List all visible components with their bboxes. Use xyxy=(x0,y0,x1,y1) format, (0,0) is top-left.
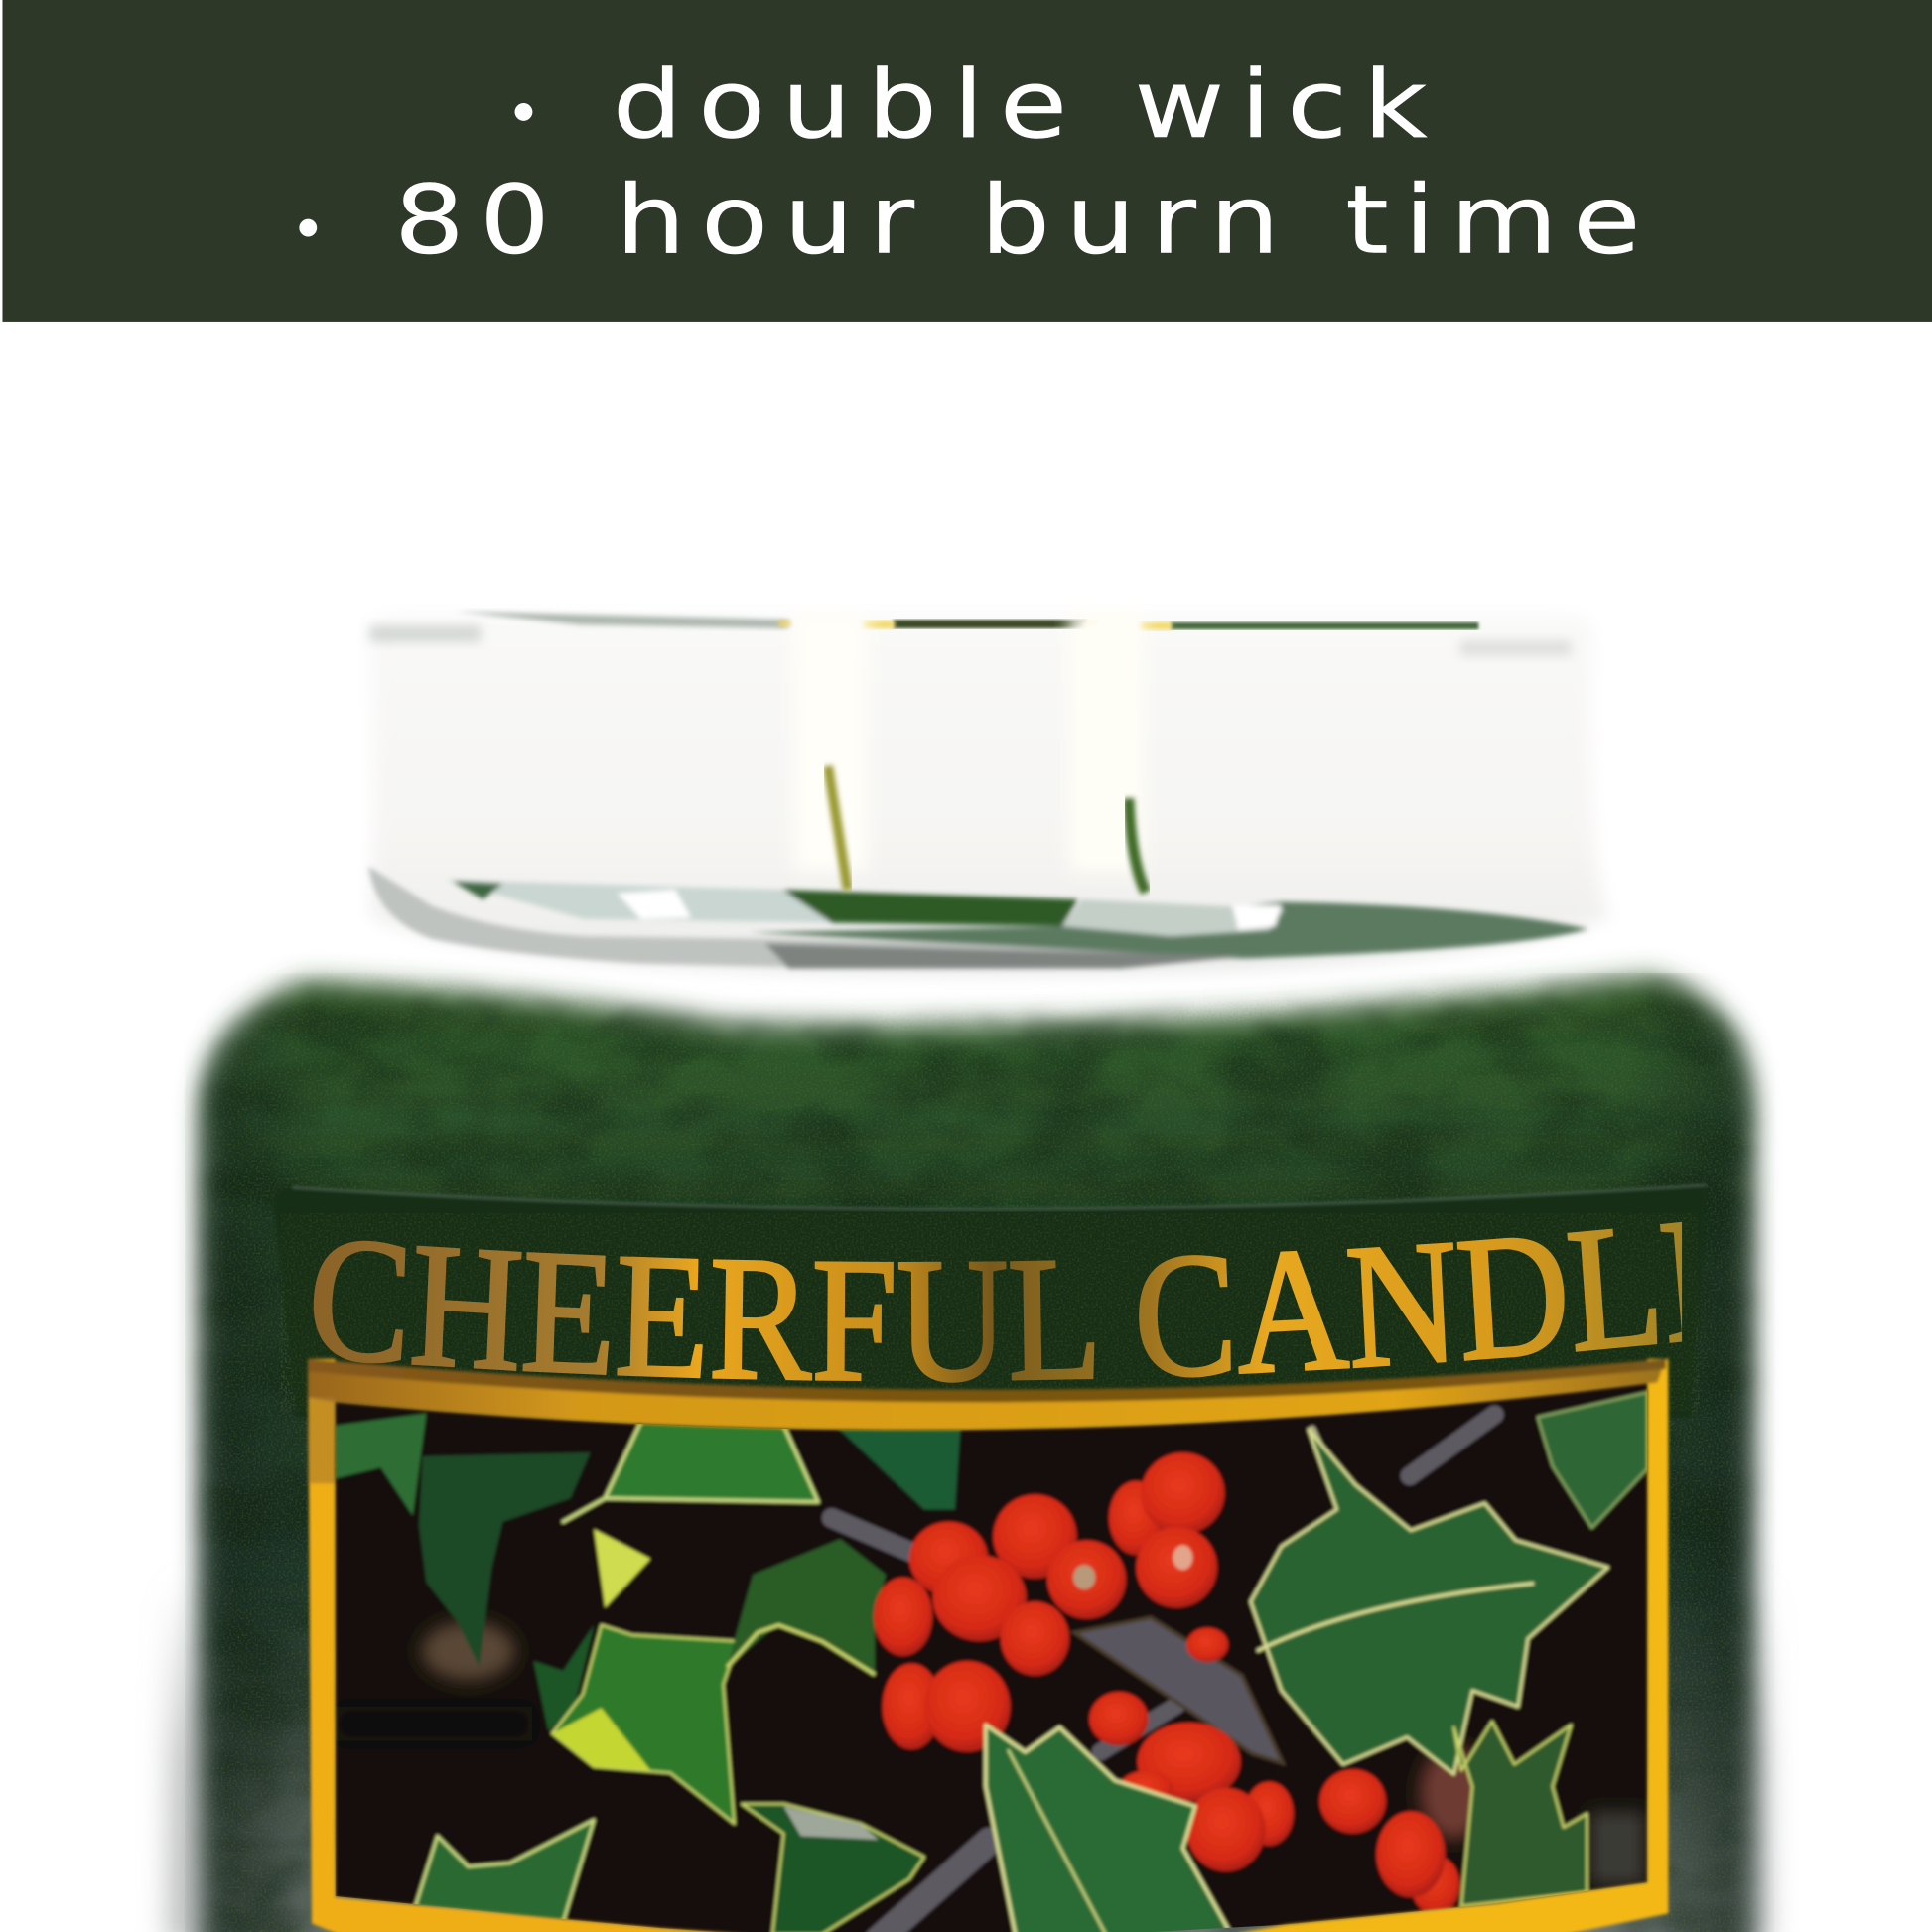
small dark leaf xyxy=(533,1625,594,1731)
brand name: CHEERFUL CANDLE xyxy=(314,1221,1682,1383)
big leaf midrib xyxy=(1257,1584,1534,1651)
flame glow left xyxy=(793,613,868,871)
feature: double wick: double wick xyxy=(613,50,1427,160)
leaf upper left xyxy=(419,1452,590,1667)
glass rim and neck xyxy=(367,612,1609,973)
leaf overlapping berries xyxy=(986,1725,1235,1932)
left side haze xyxy=(170,1578,203,1932)
product photo: holly xyxy=(321,1380,1676,1932)
right edge and bottom xyxy=(1232,1359,1668,1932)
left edge upper brown xyxy=(308,1397,336,1483)
bright leaf highlight xyxy=(552,1708,650,1770)
leaf top left corner xyxy=(336,1414,426,1516)
left edge xyxy=(308,1359,752,1932)
overlapping leaf midrib xyxy=(1008,1749,1109,1932)
header band xyxy=(2,0,1932,322)
pale spike xyxy=(594,1529,650,1608)
wax pool xyxy=(368,866,1588,968)
wick right xyxy=(1129,798,1146,893)
leaf bottom centre left xyxy=(742,1804,924,1932)
wax mottling xyxy=(185,973,1774,1932)
wick left xyxy=(828,766,848,890)
leaf centre edge xyxy=(727,1625,875,1675)
photo background xyxy=(321,1380,1676,1932)
big right leaf xyxy=(1251,1430,1608,1774)
leaf top centre left xyxy=(563,1417,818,1522)
right side haze xyxy=(1739,1578,1767,1932)
candle jar xyxy=(153,608,1784,1932)
wax body xyxy=(204,977,1749,1932)
red berries xyxy=(874,1452,1460,1915)
leaf middle left xyxy=(552,1625,738,1824)
wick right refraction xyxy=(1139,905,1146,1017)
thick branch xyxy=(1074,1618,1283,1763)
flame glow right xyxy=(1069,613,1144,871)
leaf top centre xyxy=(837,1430,963,1513)
holly leaves xyxy=(336,1392,1647,1932)
leaf gray glint xyxy=(783,1806,879,1840)
leaf bottom right xyxy=(1453,1722,1587,1906)
gold label frame xyxy=(308,1359,1668,1932)
label panel xyxy=(274,1185,1707,1417)
background tones xyxy=(336,1621,1645,1885)
top gold ribbon xyxy=(308,1359,1666,1430)
feature: 80 hour burn time: 80 hour burn time xyxy=(394,166,1641,276)
leaf centre xyxy=(727,1539,886,1675)
leaf top right xyxy=(1538,1392,1647,1528)
branches xyxy=(832,1415,1494,1932)
leaf bottom left xyxy=(407,1820,594,1932)
